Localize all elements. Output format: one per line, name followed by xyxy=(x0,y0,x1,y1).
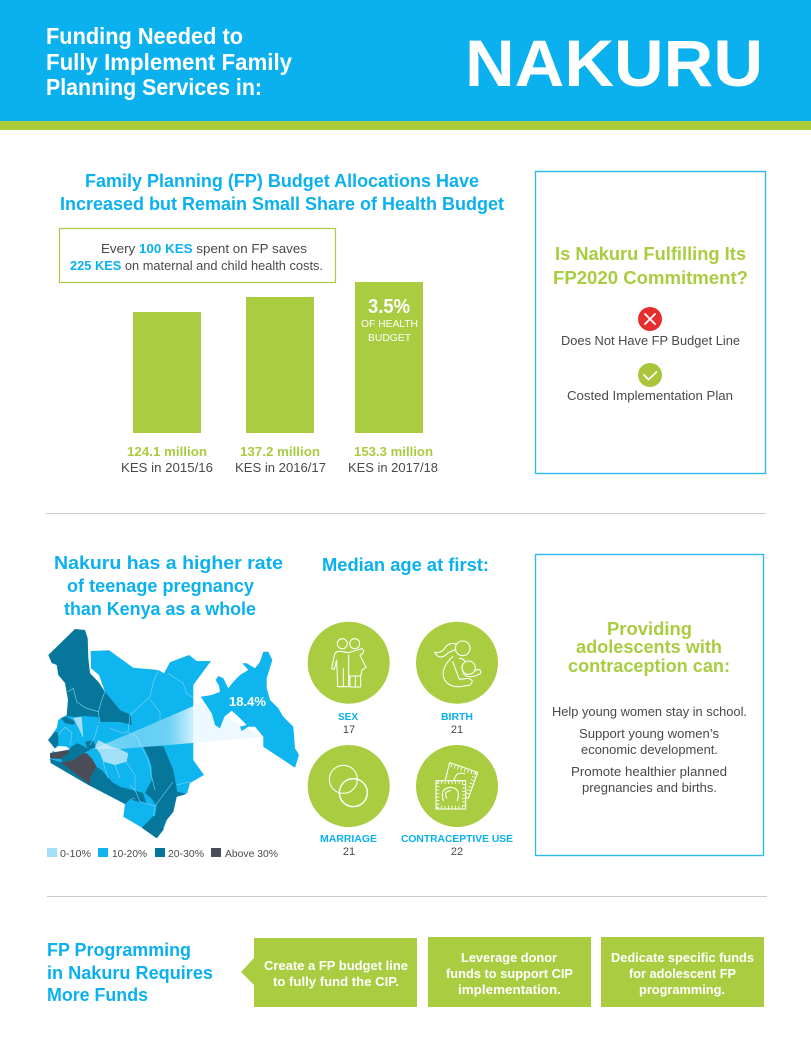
header banner xyxy=(0,0,811,130)
bar 2017/18: 153.3 million xyxy=(354,445,433,459)
recommendation: leverage donor funds: funds to support CIP xyxy=(446,966,573,981)
callout: savings: Every 100 KES spent on FP saves xyxy=(101,241,308,256)
median age: contraceptive use xyxy=(401,745,513,858)
median age: sex: SEX xyxy=(338,711,358,723)
bar 2017/18: KES in 2017/18 xyxy=(348,460,438,475)
section heading: teenage pregnancy: than Kenya as a whole xyxy=(64,598,256,619)
median age: sex xyxy=(308,622,390,736)
bar 2017/18: OF HEALTH xyxy=(361,319,418,330)
recommendation: leverage donor funds: implementation. xyxy=(458,982,561,997)
section heading: budget allocations xyxy=(60,170,504,214)
recommendation: dedicate specific funds: for adolescent FP xyxy=(629,966,736,981)
benefit: economic development: economic development. xyxy=(581,742,718,757)
bar chart: FP budget xyxy=(121,282,438,475)
panel heading: Providing xyxy=(607,619,692,639)
median age: marriage xyxy=(308,745,390,858)
recommendation: create budget line: to fully fund the CIP. xyxy=(273,974,399,989)
section heading: median age: Median age at first: xyxy=(322,554,489,575)
median age: contraceptive use: 22 xyxy=(451,846,463,858)
recommendation: leverage donor funds xyxy=(428,937,591,1007)
section heading: budget allocations: Family Planning (FP) Budget Allocations Have xyxy=(85,170,479,191)
bar 2017/18: BUDGET xyxy=(368,333,411,344)
Nakuru rate label: 18.4% xyxy=(229,694,266,709)
map base: 10-20% counties xyxy=(48,650,211,838)
Nakuru county enlarged xyxy=(201,652,299,768)
icon: rings xyxy=(329,765,367,807)
median age: birth xyxy=(416,622,498,736)
map legend: 10-20% xyxy=(112,848,147,860)
header subtitle: Planning Services in: xyxy=(46,74,262,100)
callout: savings xyxy=(60,228,336,282)
panel: adolescent contraception benefits xyxy=(536,554,764,856)
icon: condom packets xyxy=(436,763,478,809)
recommendation: dedicate specific funds xyxy=(601,937,764,1007)
header subtitle xyxy=(46,23,292,100)
section heading: programming requires funds: More Funds xyxy=(47,984,148,1005)
panel heading: FP2020 Commitment? xyxy=(553,267,748,288)
bar 2016/17 xyxy=(235,297,326,475)
benefit: planned pregnancies: Promote healthier planned xyxy=(571,764,727,779)
map: Kenya teenage pregnancy rates xyxy=(48,629,299,838)
bar 2017/18: 3.5% xyxy=(368,296,410,318)
section heading: programming requires funds xyxy=(47,939,213,1005)
map legend: Above 30% xyxy=(225,848,278,860)
median age: contraceptive use: CONTRACEPTIVE USE xyxy=(401,833,513,845)
bar 2015/16: KES in 2015/16 xyxy=(121,460,213,475)
benefit: economic development: Support young women’s xyxy=(579,726,719,741)
panel heading: Is Nakuru Fulfilling Its xyxy=(555,243,746,264)
recommendation: create budget line: Create a FP budget line xyxy=(264,958,408,973)
icon: mother and baby xyxy=(435,641,481,687)
map legend: 0-10% xyxy=(60,848,91,860)
bar 2015/16 xyxy=(121,312,213,475)
recommendation: create budget line xyxy=(241,938,417,1007)
map legend xyxy=(47,848,278,860)
median age: marriage: 21 xyxy=(343,846,355,858)
section heading: teenage pregnancy: Nakuru has a higher rate xyxy=(54,552,283,573)
icon: couple xyxy=(332,639,366,687)
section heading: programming requires funds: in Nakuru Requires xyxy=(47,962,213,983)
benefit: economic development xyxy=(579,726,719,757)
map: 20-30% counties xyxy=(48,629,187,838)
header title: county name: NAKURU xyxy=(465,26,763,100)
header subtitle: Funding Needed to xyxy=(46,23,243,49)
recommendation: leverage donor funds: Leverage donor xyxy=(461,950,557,965)
benefit: stay in school: Help young women stay in school. xyxy=(552,704,747,719)
map: 0-10% counties xyxy=(73,717,128,765)
icon: red cross xyxy=(638,307,662,331)
section heading: programming requires funds: FP Programming xyxy=(47,939,191,960)
benefit: planned pregnancies: pregnancies and births. xyxy=(582,780,717,795)
panel heading xyxy=(568,619,730,676)
status: no budget line: Does Not Have FP Budget Line xyxy=(561,333,740,348)
callout wedge xyxy=(93,703,263,749)
map legend: 20-30% xyxy=(168,848,204,860)
benefit: planned pregnancies xyxy=(571,764,727,795)
bar 2016/17: 137.2 million xyxy=(240,445,320,459)
median age: birth: BIRTH xyxy=(441,711,473,723)
median age: birth: 21 xyxy=(451,724,463,736)
panel heading: contraception can: xyxy=(568,656,730,676)
median age: sex: 17 xyxy=(343,724,355,736)
bar 2015/16: 124.1 million xyxy=(127,445,207,459)
panel heading: adolescents with xyxy=(576,637,722,657)
section heading: teenage pregnancy: of teenage pregnancy xyxy=(67,575,255,596)
recommendation: dedicate specific funds: programming. xyxy=(639,982,725,997)
section heading: budget allocations: Increased but Remain Small Share of Health Budget xyxy=(60,193,504,214)
county boundaries xyxy=(58,670,193,816)
map: Lake Victoria notch xyxy=(53,746,70,752)
panel: FP2020 commitment xyxy=(536,172,766,474)
section heading: teenage pregnancy xyxy=(54,552,283,619)
recommendation: dedicate specific funds: Dedicate specific funds xyxy=(611,950,754,965)
header subtitle: Fully Implement Family xyxy=(46,49,292,75)
panel heading xyxy=(553,243,748,288)
bar 2017/18 xyxy=(348,282,438,475)
map: above 30% counties xyxy=(50,750,97,785)
icon: green check xyxy=(638,363,662,387)
status: costed plan: Costed Implementation Plan xyxy=(567,388,733,403)
bar 2016/17: KES in 2016/17 xyxy=(235,460,326,475)
callout: savings: 225 KES on maternal and child health costs. xyxy=(70,258,323,273)
median age: marriage: MARRIAGE xyxy=(320,833,377,845)
